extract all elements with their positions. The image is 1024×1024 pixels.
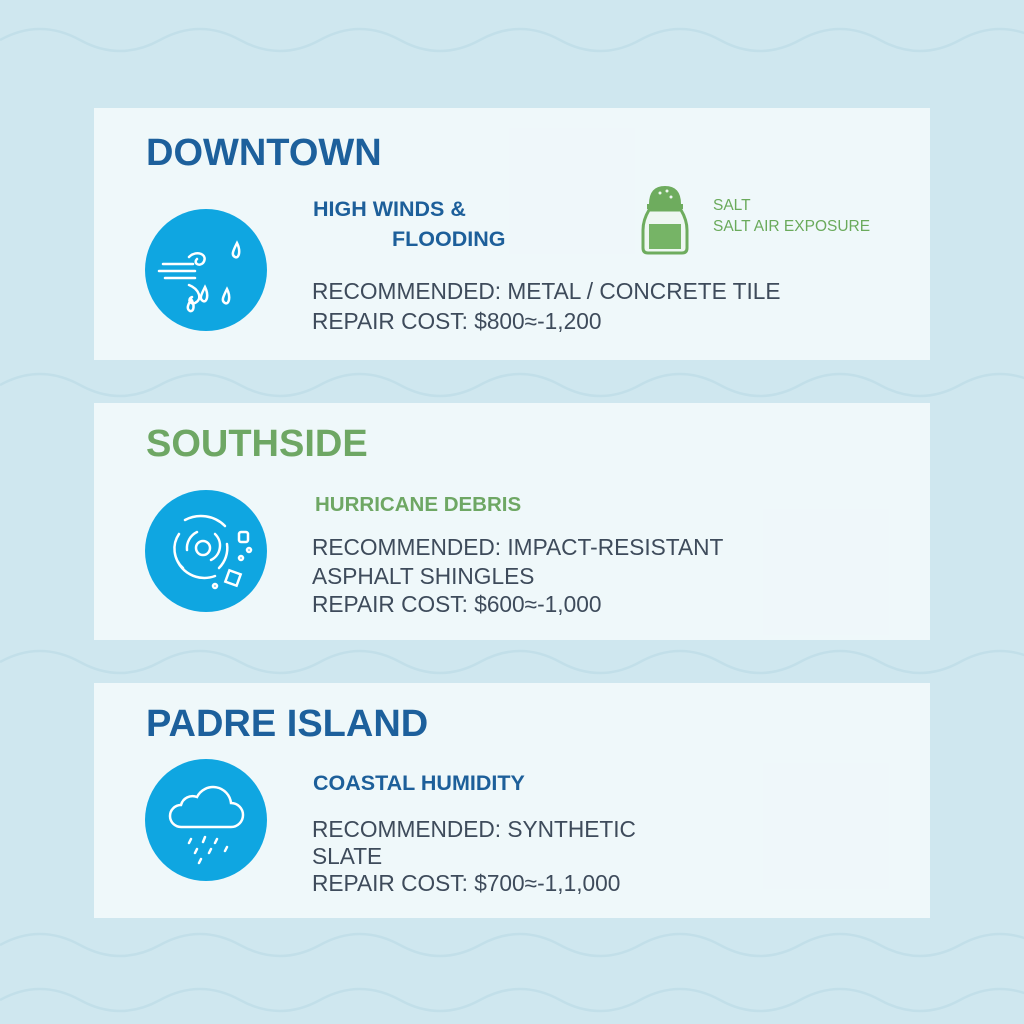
recommended and cost [312,816,636,896]
heading: southside: SOUTHSIDE [146,423,368,465]
recommended and cost [312,534,723,617]
salt label: SALT AIR EXPOSURE [713,218,870,235]
heading: padre island: PADRE ISLAND [146,703,428,745]
salt label: SALT [713,197,751,214]
hazard title: HURRICANE DEBRIS [315,493,521,516]
hazard title: COASTAL HUMIDITY [313,771,525,795]
recommended and cost: REPAIR COST: $600≈-1,000 [312,591,601,617]
recommended and cost: REPAIR COST: $800≈-1,200 [312,308,601,334]
icon: cloud rain [145,759,267,881]
salt label [713,197,870,235]
panel: southside [94,403,930,640]
panel: downtown [94,108,930,360]
icon: hurricane debris [145,490,267,612]
icon: salt shaker [642,186,688,254]
recommended and cost: RECOMMENDED: SYNTHETIC [312,816,636,842]
panel: padre island [94,683,930,918]
recommended and cost: SLATE [312,843,382,869]
recommended and cost: ASPHALT SHINGLES [312,562,534,588]
recommended and cost: RECOMMENDED: IMPACT-RESISTANT [312,534,723,560]
panel: downtown: FLOODING [392,227,505,251]
recommended and cost: REPAIR COST: $700≈-1,1,000 [312,870,620,896]
recommended and cost: RECOMMENDED: METAL / CONCRETE TILE [312,278,781,304]
recommended and cost [312,278,781,334]
hazard title: HIGH WINDS & [313,197,466,221]
icon: wind and rain [145,209,267,331]
heading: downtown: DOWNTOWN [146,132,382,174]
